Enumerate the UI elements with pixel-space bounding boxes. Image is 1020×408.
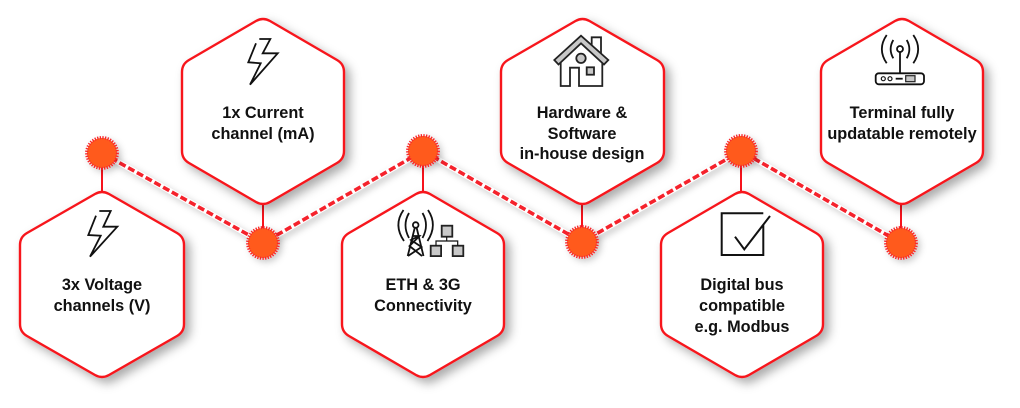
panel: hardware and software design (501, 19, 664, 204)
label: digital bus compatible: e.g. Modbus (695, 318, 789, 336)
icon: router (876, 35, 924, 84)
label: digital bus compatible: compatible (699, 297, 785, 315)
panel: digital bus compatible (661, 192, 823, 377)
node dot 3 (408, 136, 438, 166)
node dot 6 (886, 228, 916, 258)
label: hardware and software design: in-house design (520, 145, 644, 163)
label: 1x current channel: 1x Current (222, 104, 304, 122)
panel: ETH and 3G connectivity (342, 192, 504, 377)
node dot 1 (87, 138, 117, 168)
label: hardware and software design: Software (548, 125, 616, 143)
icon: lightning bolt (248, 39, 278, 85)
icon: house (554, 36, 608, 86)
stem connectors (102, 165, 901, 230)
label: terminal fully updatable remotely: Terminal fully (850, 104, 954, 122)
icon: checkbox (722, 213, 770, 255)
label: terminal fully updatable remotely: updatable remotely (827, 125, 977, 143)
label: digital bus compatible: Digital bus (700, 276, 784, 294)
panel: 3x voltage channels (20, 192, 184, 377)
node dot 2 (248, 228, 278, 258)
label: 1x current channel: channel (mA) (211, 125, 315, 143)
panel: terminal fully updatable remotely (821, 19, 983, 204)
icon: lightning bolt (88, 211, 117, 257)
panel: 1x current channel (182, 19, 344, 204)
label: 3x voltage channels: channels (V) (54, 297, 150, 315)
node dot 5 (726, 136, 756, 166)
icon: radio tower and network (398, 210, 463, 256)
label: ETH and 3G connectivity: Connectivity (374, 297, 472, 315)
dotted connecting line (102, 151, 901, 243)
label: 3x voltage channels: 3x Voltage (62, 276, 142, 294)
label: hardware and software design: Hardware & (537, 104, 627, 122)
label: ETH and 3G connectivity: ETH & 3G (385, 276, 461, 294)
node dot 4 (567, 227, 597, 257)
